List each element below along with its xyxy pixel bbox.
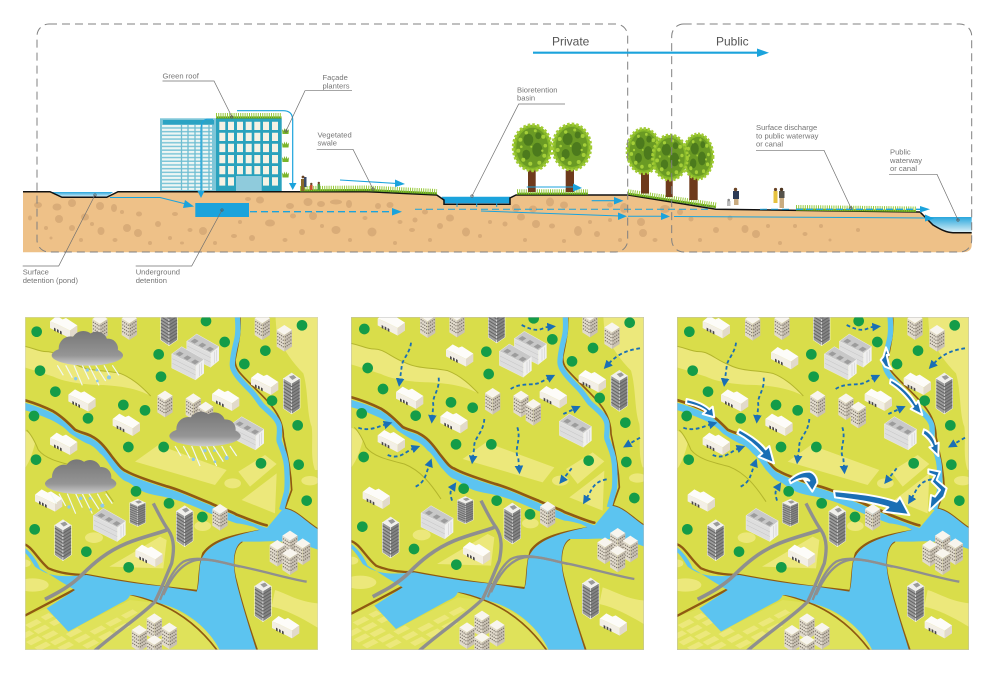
panel: city map with rain clouds xyxy=(25,317,318,650)
extra white building xyxy=(771,347,798,369)
flow arrows xyxy=(110,111,934,222)
label: underground detention xyxy=(136,209,223,285)
extra white building xyxy=(446,344,473,367)
panel: city map with dashed runoff arrows xyxy=(351,317,644,650)
label: surface detention: detention (pond) xyxy=(23,276,78,285)
green roof grass xyxy=(216,116,282,118)
label: bioretention basin: basin xyxy=(517,94,535,103)
label: surface detention: Surface xyxy=(23,268,49,277)
label: bioretention basin: Bioretention xyxy=(517,85,558,94)
label: vegetated swale xyxy=(317,130,374,190)
bold white-edged river flow arrows xyxy=(686,347,947,515)
label: bioretention basin xyxy=(471,85,565,197)
right office building xyxy=(216,118,282,191)
dashed outline: public zone xyxy=(672,24,972,252)
label: green roof: Green roof xyxy=(162,71,200,80)
dashed runoff arrows xyxy=(683,325,965,501)
label: public waterway: or canal xyxy=(890,164,917,173)
private to public arrow xyxy=(533,48,769,57)
label: surface detention xyxy=(23,194,96,285)
dashed runoff arrows xyxy=(358,325,640,501)
trees xyxy=(513,124,713,200)
bioretention basin water xyxy=(442,197,510,203)
bioretention bank grass xyxy=(517,192,588,194)
label: underground detention: Underground xyxy=(136,268,180,277)
heading: Private: Private xyxy=(552,34,590,48)
canal water xyxy=(925,217,972,233)
label: vegetated swale: swale xyxy=(318,139,337,148)
label: underground detention: detention xyxy=(136,276,167,285)
soil ground xyxy=(23,192,972,252)
left office building xyxy=(160,118,216,191)
label: façade planters xyxy=(285,73,352,132)
public swale grass xyxy=(796,208,916,211)
label: surface discharge: or canal xyxy=(756,140,783,149)
swale grass xyxy=(300,188,437,194)
heading: Public: Public xyxy=(716,34,749,48)
label: surface discharge: Surface discharge xyxy=(756,123,817,132)
label: vegetated swale: Vegetated xyxy=(318,130,352,139)
label: public waterway xyxy=(889,148,959,221)
soil stones xyxy=(28,196,860,245)
label: surface discharge xyxy=(756,123,852,209)
façade planters xyxy=(282,128,289,178)
label: façade planters: planters xyxy=(322,81,350,90)
rain clouds xyxy=(45,331,241,514)
label: green roof xyxy=(162,71,233,118)
dashed outline: private zone xyxy=(37,24,628,252)
panel: city map with dashed runoff and bold river flow arrows xyxy=(677,317,969,650)
people xyxy=(301,176,784,208)
label: public waterway: Public xyxy=(890,148,911,156)
label: façade planters: Façade xyxy=(322,73,348,82)
pond water xyxy=(50,192,113,197)
label: public waterway: waterway xyxy=(889,156,922,165)
underground detention tank xyxy=(195,203,249,217)
ground profile line xyxy=(23,192,972,233)
slope grass xyxy=(628,192,716,207)
panel: private zone section diagram xyxy=(23,24,972,285)
label: surface discharge: to public waterway xyxy=(756,131,819,140)
